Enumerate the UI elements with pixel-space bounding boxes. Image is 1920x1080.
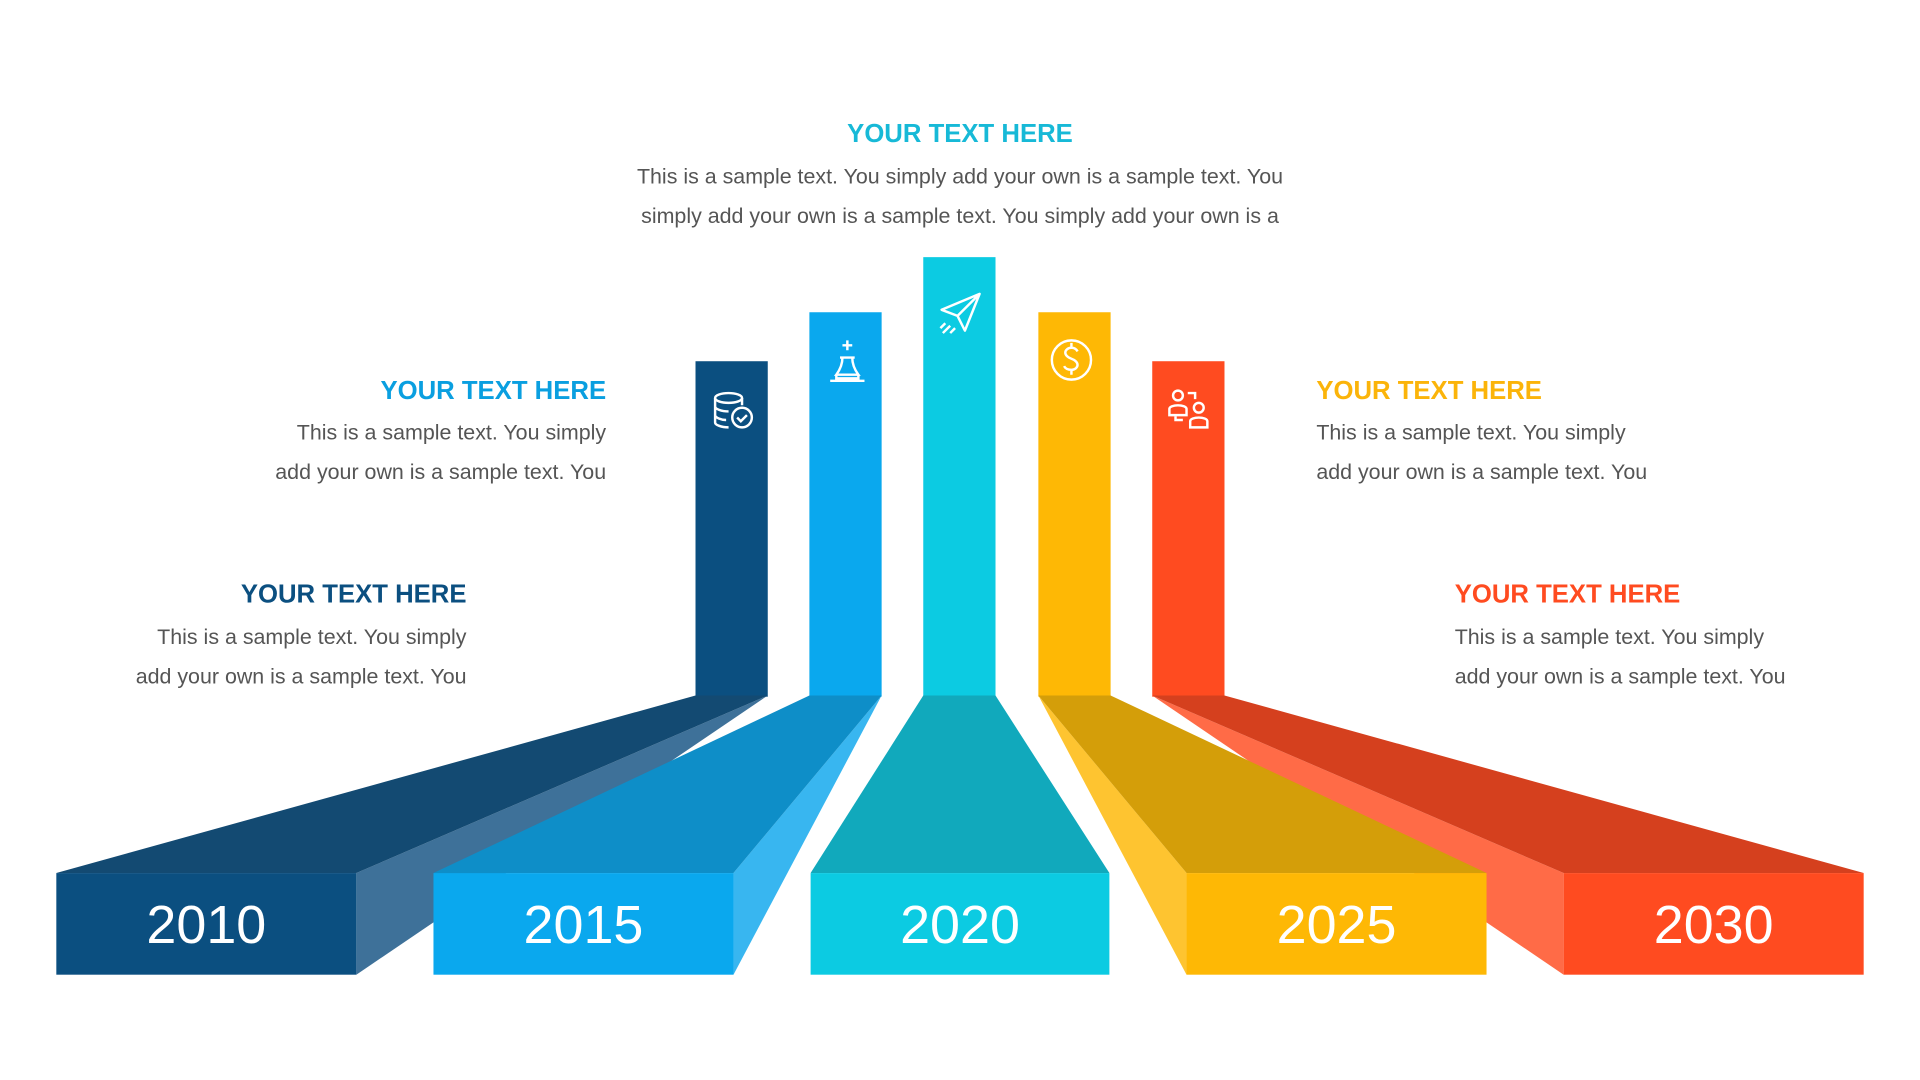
text block: lower left (136, 580, 467, 688)
icon: chess king (830, 340, 864, 381)
text block: lower right: YOUR TEXT HERE (1455, 580, 1680, 608)
text block: lower right: add your own is a sample text. You (1455, 664, 1786, 688)
text block: lower right (1455, 580, 1786, 688)
step 2020 (811, 257, 1109, 975)
icon: paper plane (940, 294, 980, 333)
top text block: simply add your own is a sample text. You simply add your own is a (641, 204, 1279, 228)
icon: people exchange (1169, 391, 1207, 427)
text block: upper left: This is a sample text. You simply (297, 421, 606, 445)
text block: lower right: This is a sample text. You simply (1455, 625, 1764, 649)
text block: upper left: add your own is a sample text. You (275, 460, 606, 484)
text block: upper right: This is a sample text. You simply (1316, 421, 1626, 445)
text block: lower left: add your own is a sample text. You (136, 664, 467, 688)
step 2030 (1152, 361, 1864, 975)
text block: lower left: This is a sample text. You simply (157, 625, 467, 649)
step 2025: 2025 (1277, 895, 1396, 955)
top text block: This is a sample text. You simply add your own is a sample text. You (637, 165, 1283, 189)
step 2030: 2030 (1654, 895, 1774, 955)
step 2015: 2015 (524, 895, 643, 955)
step 2025 (1038, 312, 1487, 975)
step 2010 (56, 361, 768, 975)
step 2010: 2010 (146, 895, 266, 955)
text block: lower left: YOUR TEXT HERE (241, 580, 467, 608)
step 2020: 2020 (900, 895, 1020, 955)
icon: dollar coin (1052, 340, 1091, 380)
text block: upper right (1316, 377, 1647, 484)
top text block (637, 120, 1283, 228)
text block: upper left (275, 377, 606, 484)
text block: upper right: YOUR TEXT HERE (1316, 377, 1542, 405)
text block: upper left: YOUR TEXT HERE (380, 377, 606, 405)
top text block: YOUR TEXT HERE (847, 120, 1073, 148)
text block: upper right: add your own is a sample text. You (1316, 460, 1647, 484)
step 2015 (433, 312, 882, 975)
icon: database check (715, 393, 752, 427)
